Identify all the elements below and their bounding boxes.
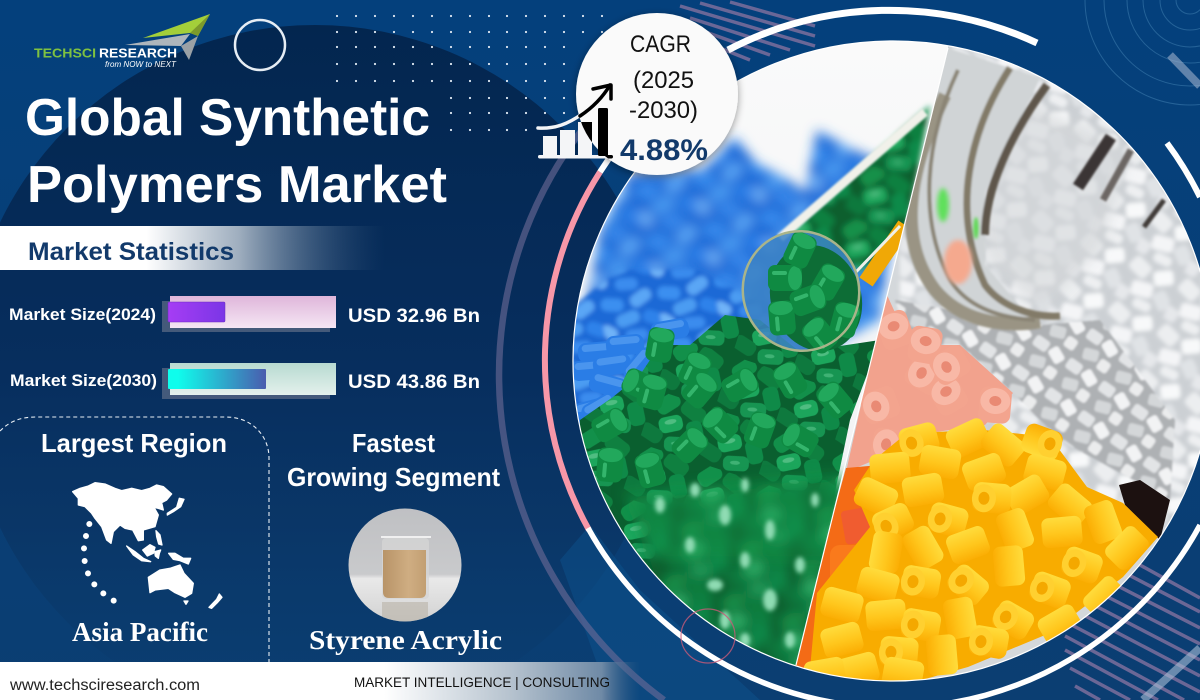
dot grid (336, 15, 603, 131)
CAGR text: (2025 (633, 67, 694, 94)
white circle accent (235, 20, 285, 70)
market size 2024 row: USD 32.96 Bn (348, 305, 480, 327)
footer band: www.techsciresearch.com (9, 677, 200, 694)
largest region panel: Largest Region (41, 428, 227, 458)
yellow pellets (803, 416, 1158, 692)
CAGR text (629, 31, 698, 124)
decorative concentric rings (1085, 0, 1200, 105)
blurred blue pellets (580, 123, 898, 350)
market statistics heading: Market Statistics (28, 238, 234, 266)
footer band: MARKET INTELLIGENCE | CONSULTING (354, 675, 610, 690)
glass tube (780, 105, 930, 282)
fastest growing segment panel (287, 428, 502, 655)
faint outer ring (499, 55, 1200, 700)
CAGR callout (538, 13, 738, 175)
fastest growing segment panel: Growing Segment (287, 462, 500, 492)
market size 2030 row: USD 43.86 Bn (348, 371, 480, 393)
icon: beaker photo (348, 508, 462, 622)
photo: clear and coloured pellets (780, 30, 1200, 700)
logo (34, 14, 210, 69)
largest region panel (0, 417, 269, 662)
photo collage of polymer pellets (560, 30, 1200, 700)
fastest growing segment panel: Fastest (352, 428, 435, 458)
CAGR text: -2030) (629, 97, 698, 124)
largest region panel: Asia Pacific (72, 617, 208, 647)
photo border (573, 41, 1200, 681)
title: Global Synthetic (25, 89, 430, 147)
market size 2024 row: Market Size(2024) (9, 305, 156, 324)
photo: blue and green pellets (574, 42, 948, 666)
white and pink ring (545, 10, 1200, 700)
small red circle accent (681, 609, 735, 663)
logo: RESEARCH (99, 46, 177, 60)
logo: from NOW to NEXT (105, 60, 177, 69)
market statistics heading (0, 226, 385, 270)
green pellets pile (580, 315, 880, 690)
dark gap (1119, 480, 1170, 540)
sharp blue pellets (574, 268, 746, 422)
icon: asia pacific map (73, 483, 222, 608)
icon: growth chart (538, 85, 613, 158)
CAGR text: CAGR (630, 31, 691, 58)
market size 2024 row (9, 296, 480, 332)
logo: TECHSCI (34, 46, 96, 60)
glass jar (905, 48, 1164, 324)
title (25, 89, 447, 214)
diagonal stripes (680, 2, 1200, 700)
orange pellets (796, 466, 870, 668)
market size 2030 row: Market Size(2030) (10, 371, 157, 390)
CAGR value: 4.88% (620, 134, 708, 167)
pink pellets (846, 295, 1013, 472)
footer band (0, 662, 640, 700)
fastest growing segment panel: Styrene Acrylic (309, 625, 502, 655)
tube opening (742, 230, 862, 354)
title: Polymers Market (27, 156, 447, 214)
market size 2030 row (10, 363, 480, 399)
